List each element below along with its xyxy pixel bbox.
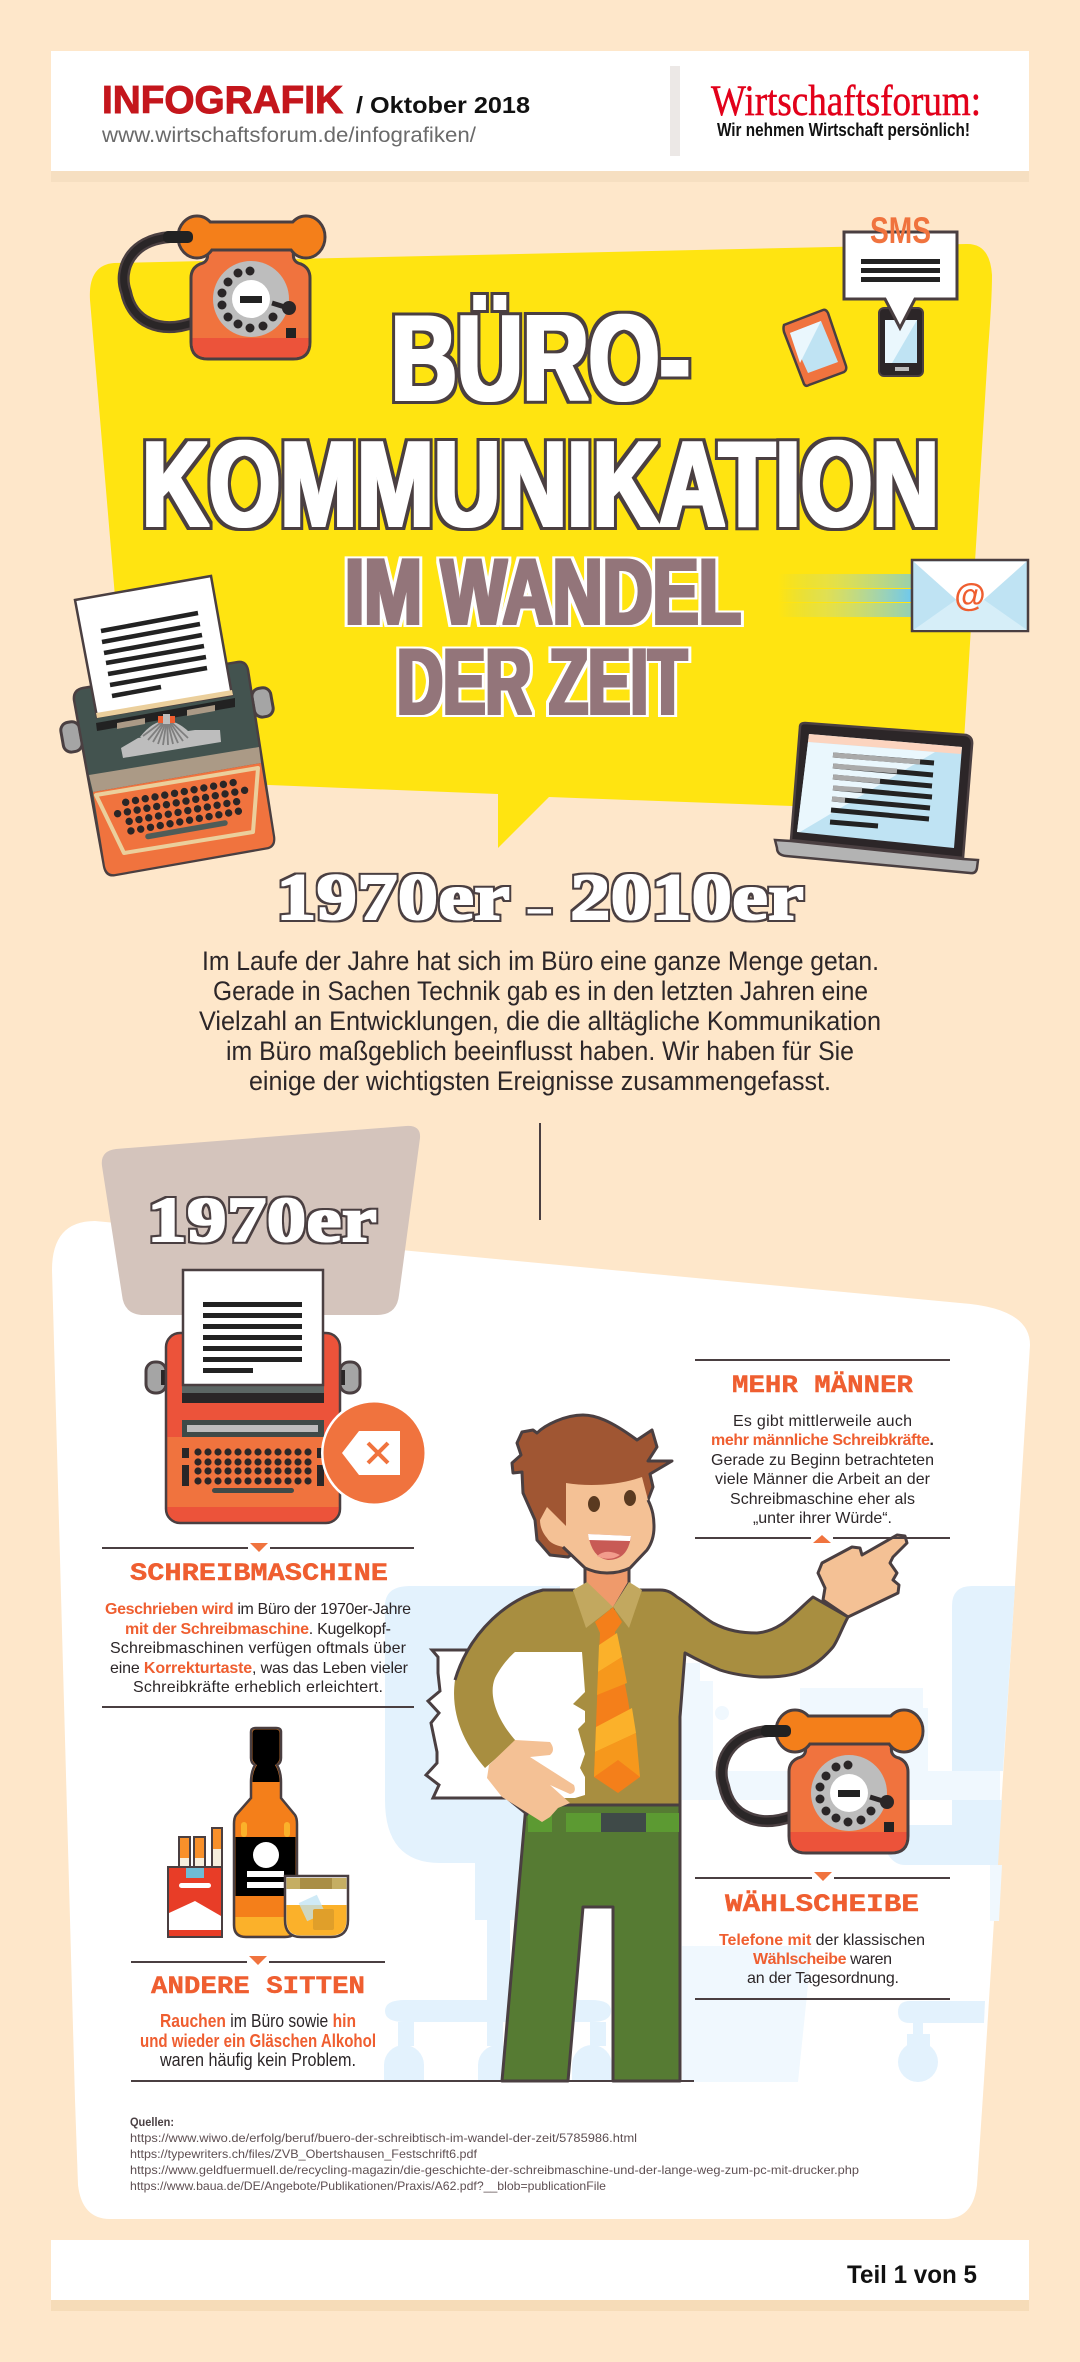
icon: rotary phone right: [722, 1710, 923, 1853]
eyes: [588, 1496, 600, 1512]
illustration: man pointing: [426, 1415, 907, 2081]
typewriter keys: [112, 776, 252, 837]
header title: INFOGRAFIK: [102, 79, 343, 122]
heading: SCHREIBMASCHINE: [130, 1559, 388, 1588]
sms label: SMS: [870, 210, 931, 251]
icon: email with speed trail: [778, 560, 1028, 631]
section: Mehr Männer: viele Männer die Arbeit an der: [715, 1471, 931, 1488]
sms bubble: [844, 232, 957, 328]
body text: Es gibt mittlerweile auch: [733, 1413, 912, 1430]
cigarette pack: [179, 1837, 190, 1869]
section: Schreibmaschine: [102, 1543, 414, 1708]
carriage: [96, 698, 235, 731]
section: Mehr Männer: mehr männliche Schreibkräfte.: [711, 1432, 934, 1449]
brand slogan: Wir nehmen Wirtschaft persönlich!: [717, 120, 970, 140]
section: Andere Sitten: waren häufig kein Problem.: [159, 2050, 356, 2070]
subtitle: decades: 1970er – 2010er: [276, 861, 804, 934]
laptop base: [775, 840, 978, 873]
tab label: 1970er: [147, 1184, 377, 1255]
pointing hand: [818, 1535, 907, 1617]
intro paragraph: im Büro maßgeblich beeinflusst haben. Wir haben für Sie: [226, 1036, 854, 1066]
mouth: [588, 1534, 631, 1560]
intro paragraph: Gerade in Sachen Technik gab es in den letzten Jahren eine: [213, 976, 868, 1006]
yellow speech bubble: [90, 244, 992, 848]
face and ear: [540, 1477, 654, 1573]
part indicator: Teil 1 von 5: [847, 2261, 977, 2289]
icon: rotary phone top: [124, 216, 325, 359]
at sign: @: [954, 577, 986, 613]
section: Mehr Männer: [695, 1359, 950, 1543]
section: Schreibmaschine: Schreibkräfte erheblich erleichtert.: [133, 1679, 383, 1696]
sources: https://www.geldfuermuell.de/recycling-magazin/die-geschichte-der-schreibmaschine-und-der-lange-weg-zum-pc-mit-drucker.php: [130, 2163, 859, 2177]
section: Schreibmaschine: eine Korrekturtaste, was das Leben vieler: [110, 1660, 409, 1677]
source links: https://www.wiwo.de/erfolg/beruf/buero-der-schreibtisch-im-wandel-der-zeit/5785986.html: [130, 2131, 637, 2145]
body text: Telefone mit der klassischen: [719, 1932, 925, 1949]
sources heading: Quellen:: [130, 2115, 174, 2129]
sleeve: [454, 1590, 585, 1768]
title line 1: BÜRO-: [391, 290, 690, 426]
bottle: [234, 1728, 297, 1937]
belt: [528, 1813, 679, 1832]
icon: front typewriter: [146, 1270, 360, 1523]
section: Andere Sitten: [131, 1956, 385, 2070]
trousers: [502, 1805, 680, 2081]
heading: ANDERE SITTEN: [151, 1972, 365, 2001]
neck: [585, 1560, 629, 1610]
header bar: [51, 51, 1029, 182]
icon: tilted typewriter: [60, 576, 274, 875]
hair: [512, 1415, 672, 1557]
body text: Geschrieben wird im Büro der 1970er-Jahre: [105, 1601, 411, 1618]
sources: https://typewriters.ch/files/ZVB_Obertshausen_Festschrift6.pdf: [130, 2147, 478, 2161]
paper: [183, 1270, 323, 1385]
intro paragraph: Vielzahl an Entwicklungen, die die alltägliche Kommunikation: [199, 1006, 881, 1036]
icon: bottle, glass and cigarettes: [168, 1728, 348, 1937]
section: Mehr Männer: Gerade zu Beginn betrachteten: [711, 1452, 934, 1469]
section: Wählscheibe: an der Tagesordnung.: [747, 1970, 899, 1987]
paper stack: [426, 1650, 585, 1798]
section: Andere Sitten: und wieder ein Gläschen Alkohol: [140, 2031, 376, 2051]
footer bar: [51, 2240, 1029, 2311]
heading: WÄHLSCHEIBE: [725, 1890, 919, 1919]
shirt torso and arm: [526, 1590, 848, 1805]
intro paragraph: Im Laufe der Jahre hat sich im Büro eine ganze Menge getan.: [202, 946, 879, 976]
intro paragraph: einige der wichtigsten Ereignisse zusammengefasst.: [249, 1066, 831, 1096]
tie: [594, 1607, 640, 1793]
icon: tablet: [784, 310, 846, 386]
sources: https://www.baua.de/DE/Angebote/Publikationen/Praxis/A62.pdf?__blob=publicationFile: [130, 2179, 606, 2193]
title line 3: IM WANDEL: [345, 539, 741, 644]
section: Schreibmaschine: mit der Schreibmaschine. Kugelkopf-: [125, 1621, 391, 1638]
header url: www.wirtschaftsforum.de/infografiken/: [101, 124, 476, 147]
baseline rule: [131, 2080, 694, 2082]
section: Mehr Männer: „unter ihrer Würde“.: [753, 1510, 892, 1527]
body text: Rauchen im Büro sowie hin: [160, 2011, 356, 2031]
sources: [130, 2115, 859, 2193]
typewriter knobs: [60, 720, 83, 753]
section: Schreibmaschine: Schreibmaschinen verfügen oftmals über: [110, 1640, 407, 1657]
left hand: [487, 1740, 575, 1822]
collar: [573, 1582, 642, 1628]
keys: [182, 1448, 324, 1486]
office background: [384, 1586, 1015, 2082]
section: Wählscheibe: Wählscheibe waren: [753, 1951, 892, 1968]
tab: 1970er: [102, 1126, 420, 1315]
section: Wählscheibe: [695, 1872, 950, 2000]
header date: / Oktober 2018: [356, 92, 530, 118]
brand logo: Wirtschaftsforum:: [711, 78, 981, 125]
typewriter paper: [75, 576, 232, 717]
timeline connector: [539, 1123, 541, 1220]
type basket: [121, 730, 221, 758]
section: Mehr Männer: Schreibmaschine eher als: [730, 1491, 915, 1508]
heading: MEHR MÄNNER: [732, 1371, 913, 1400]
main title: [142, 290, 939, 734]
icon: smartphone with SMS bubble: [844, 210, 957, 376]
intro paragraph: [199, 946, 881, 1096]
icon: backspace badge: [321, 1400, 427, 1506]
title line 4: DER ZEIT: [397, 629, 687, 734]
icon: laptop: [775, 723, 978, 873]
whisky glass: [285, 1876, 348, 1937]
panel: 1970er white card: [52, 1221, 1030, 2219]
